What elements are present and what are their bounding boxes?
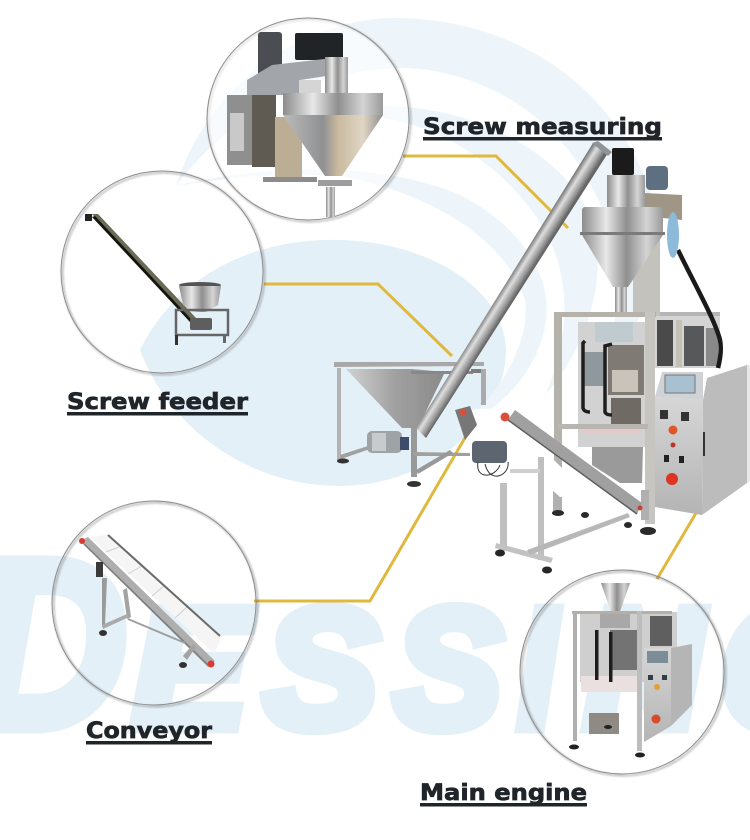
bagging machine interior <box>578 322 645 483</box>
watermark lettering: N <box>584 574 705 764</box>
heading: Main engine: Main engine <box>420 781 587 806</box>
leader line: screw measuring <box>403 156 568 228</box>
watermark lettering <box>0 510 750 778</box>
leader line: screw feeder <box>264 284 452 356</box>
circle: main engine detail <box>520 570 724 774</box>
watermark lettering: I <box>518 574 559 764</box>
watermark lettering: E <box>132 574 253 764</box>
watermark lettering: S <box>394 574 502 764</box>
main machine assembly <box>334 141 750 574</box>
leader line: main engine <box>657 503 702 579</box>
packaging conveyor <box>455 406 642 574</box>
feeder hopper <box>334 362 486 487</box>
circle: conveyor detail <box>52 501 256 705</box>
circle: screw feeder detail <box>61 171 263 373</box>
watermark lettering: S <box>264 574 378 764</box>
back frame mechanics <box>655 312 720 368</box>
icon: auger filler head <box>227 32 383 217</box>
control cabinet <box>655 365 750 515</box>
leader line: conveyor <box>254 424 473 601</box>
machine frame <box>552 312 656 535</box>
blue bag and hose <box>667 212 721 368</box>
circle: screw measuring detail <box>207 18 409 220</box>
auger filler <box>580 148 682 317</box>
heading: Screw measuring: Screw measuring <box>423 115 662 140</box>
heading: Screw feeder: Screw feeder <box>67 390 248 415</box>
inclined screw conveyor tube <box>416 141 612 438</box>
icon: packaging machine <box>569 583 692 758</box>
icon: incline conveyor <box>79 535 222 668</box>
icon: screw feeder <box>85 214 228 345</box>
heading: Conveyor: Conveyor <box>86 719 212 744</box>
